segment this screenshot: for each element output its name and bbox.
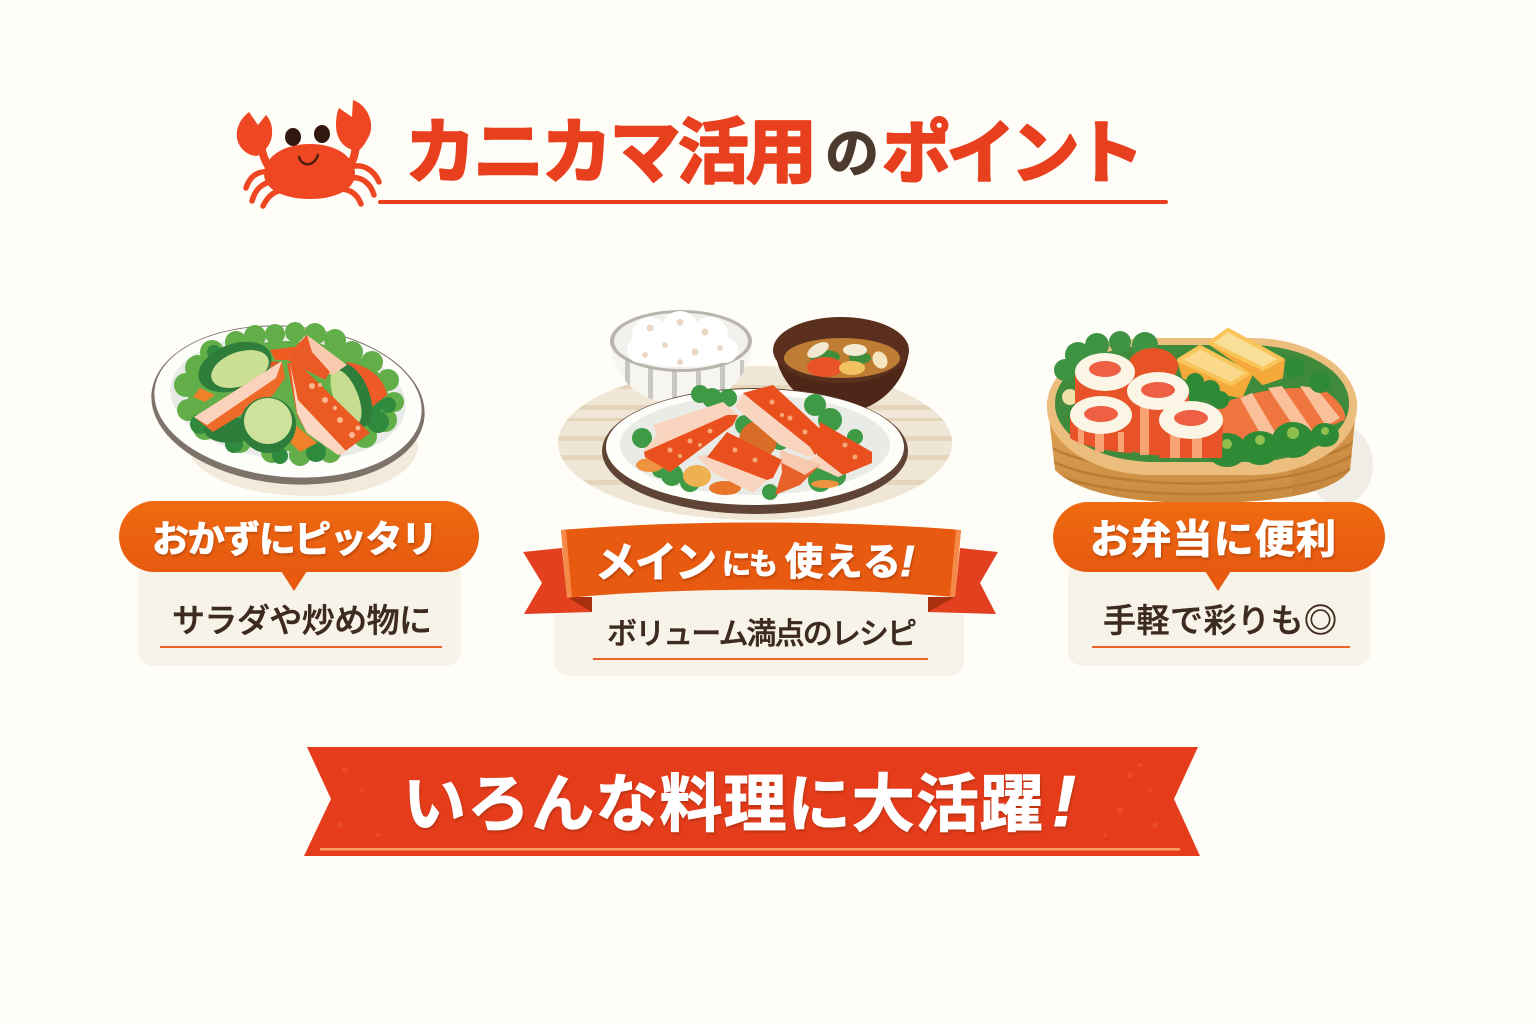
icon: crab mascot [237, 100, 379, 206]
banner: closing message: いろんな料理に大活躍 [403, 770, 1043, 840]
underline: bento [1092, 646, 1350, 648]
title underline [378, 200, 1168, 204]
panel: okazu (side dish) [119, 314, 479, 666]
sticks [644, 402, 738, 472]
illustration: main dish set [555, 310, 955, 520]
tamago [1179, 330, 1283, 396]
illustration: bento box [1047, 330, 1373, 505]
card: okazu description [138, 560, 461, 666]
greens [632, 385, 863, 500]
underline: okazu [160, 646, 442, 648]
label: bento pill: お弁当に便利 [1090, 518, 1336, 562]
peas [1186, 358, 1339, 467]
label: okazu pill: おかずにピッタリ [152, 519, 438, 560]
soup bowl [773, 317, 909, 413]
ribbon: main dish: 使える [785, 542, 901, 584]
tomato [1128, 348, 1178, 384]
ribbon: main dish: メイン [595, 539, 717, 586]
label: okazu pill [119, 501, 479, 591]
infographic canvas [119, 100, 1385, 856]
roll 1 [1075, 353, 1135, 415]
card: bento description [1068, 560, 1371, 666]
roll 4 [1159, 401, 1223, 458]
ribbon: main dish [523, 522, 998, 614]
panel: bento [1047, 330, 1385, 666]
title: ポイント [882, 115, 1144, 192]
title: の [825, 124, 879, 184]
rice bowl [610, 310, 752, 406]
illustration: salad plate [145, 314, 431, 496]
ribbon: main dish: ! [900, 537, 915, 586]
label: bento pill [1053, 502, 1385, 591]
crab stick 3 [287, 335, 347, 375]
leaves [1054, 331, 1158, 381]
roll 2 [1127, 372, 1189, 456]
crab stick 2 [287, 363, 370, 455]
crab stick 1 [194, 361, 285, 432]
banner: closing message: ! [1052, 762, 1076, 842]
card: main dish description [554, 585, 964, 676]
title [405, 114, 1144, 193]
tomato and carrot [342, 362, 387, 407]
cucumbers [191, 332, 279, 402]
salmon [1215, 388, 1345, 445]
text: bento description: 手軽で彩りも◎ [1103, 602, 1337, 639]
ribbon: main dish: にも [722, 549, 778, 581]
panel: main dish [523, 310, 998, 676]
lettuce [174, 322, 404, 466]
dinner plate [602, 388, 908, 514]
text: main dish description: ボリューム満点のレシピ [607, 618, 917, 651]
underline: main dish [593, 658, 928, 660]
center cucumber [240, 397, 296, 453]
roll 3 [1070, 396, 1132, 453]
title: カニカマ活用 [405, 114, 817, 193]
banner: closing message [304, 747, 1200, 856]
text: okazu description: サラダや炒め物に [172, 602, 432, 639]
